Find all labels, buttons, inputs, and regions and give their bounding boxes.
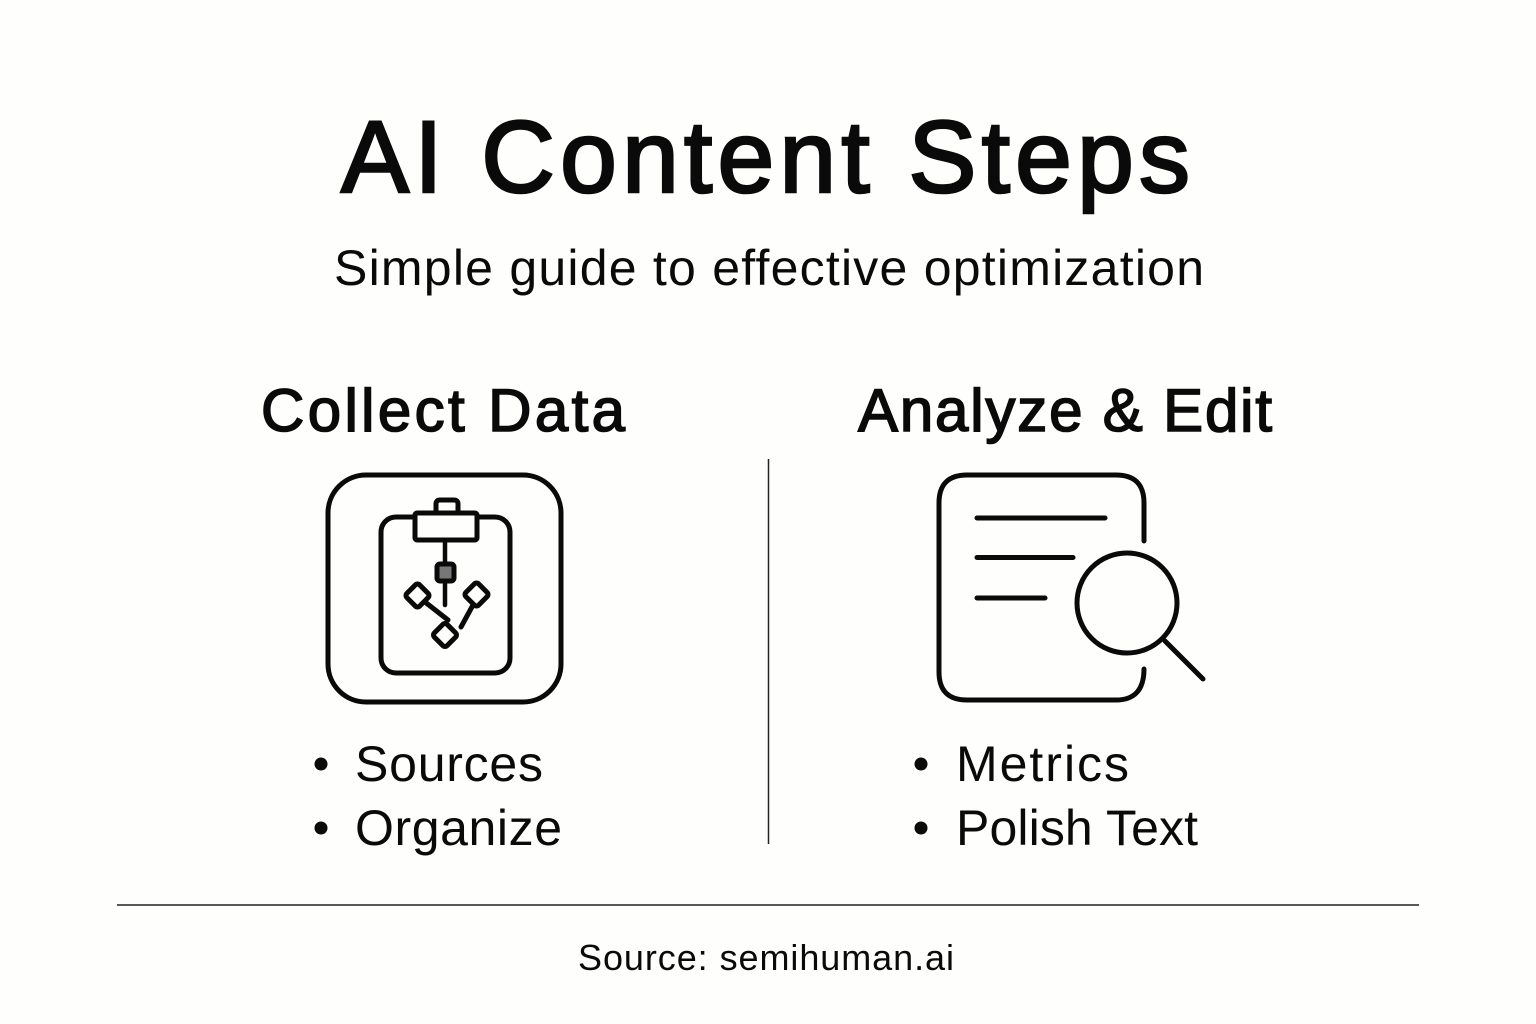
list: collect data [314,736,562,856]
subtitle: Simple guide to effective optimization [334,240,1204,296]
source line: Source: semihuman.ai [578,937,954,978]
list: analyze and edit: Metrics [956,736,1129,792]
heading: collect data: Collect Data [261,377,626,444]
heading: analyze and edit: Analyze & Edit [858,377,1272,444]
list: analyze and edit: Polish Text [956,800,1198,856]
list: collect data: Sources [355,736,543,792]
title: AI Content Steps [341,100,1190,214]
icon: clipboard with data nodes [328,475,561,702]
icon: document with magnifying glass [939,475,1203,700]
list: analyze and edit [914,736,1198,856]
list: collect data: Organize [355,800,562,856]
vertical divider [768,459,770,844]
